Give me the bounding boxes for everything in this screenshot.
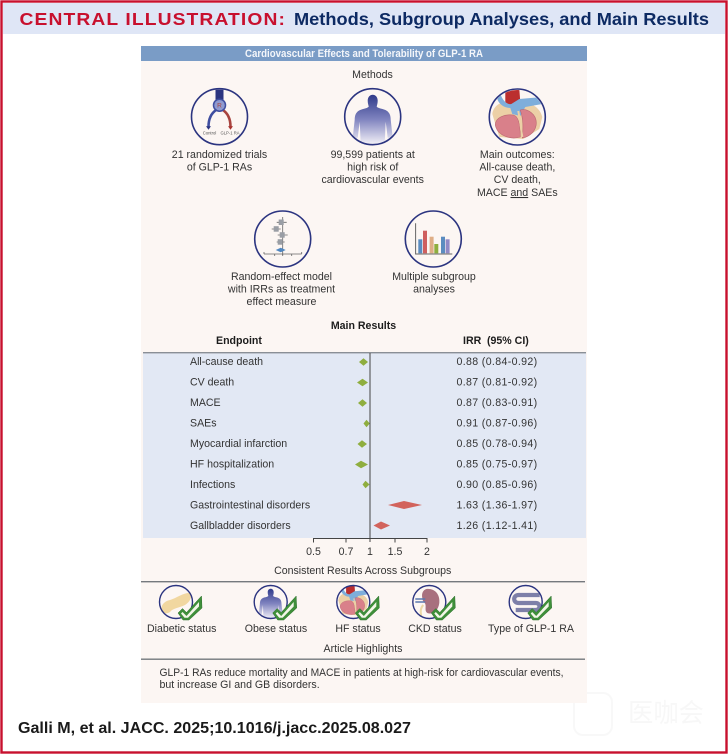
watermark [574,693,704,735]
icon: pancreas with check [160,586,202,620]
axis: 2 [424,546,430,558]
method: subgroup analyses: analyses [413,284,455,296]
IRR values [457,356,537,532]
method: main outcomes [477,89,558,199]
column headers: IRR [463,335,482,347]
IRR values: 1.63 (1.36-1.97) [457,500,537,512]
panel header: Cardiovascular Effects and Tolerability of GLP-1 RA [245,48,483,60]
label: Type of GLP-1 RA [488,623,575,635]
text: trials: 21 randomized trials [172,149,267,161]
IRR values: 1.26 (1.12-1.41) [457,520,537,532]
citation: Galli M, et al. JACC. 2025;10.1016/j.jacc.2025.08.027 [18,720,411,737]
subgroup: HF status [335,585,381,635]
method: main outcomes: MACE and SAEs [477,187,558,199]
heading: consistent results: Consistent Results Across Subgroups [274,565,451,577]
text: outcomes: Main outcomes: [480,149,555,161]
main panel [141,46,587,703]
watermark: 医咖会 [628,698,704,728]
method: randomized trials [172,89,267,174]
row labels: Gallbladder disorders [190,520,291,532]
column headers: Endpoint [216,335,262,347]
IRR values: 0.87 (0.83-0.91) [457,397,537,409]
row labels [190,356,310,532]
axis: 0.7 [339,546,353,558]
method: random-effect model: effect measure [247,296,317,308]
label: CKD status [408,623,462,635]
heading: methods: Methods [352,69,393,81]
label: HF status [335,623,381,635]
column headers: (95% CI) [487,335,529,347]
icon: patient silhouette [345,89,401,145]
row labels: Gastrointestinal disorders [190,500,310,512]
axis: 1.5 [388,546,402,558]
method: main outcomes: CV death, [494,174,541,186]
text: model: Random-effect model [231,271,332,283]
axis: 0.5 [306,546,321,558]
label: Diabetic status [147,623,216,635]
icon: randomization split: Control [203,131,216,136]
icon: patient with check [254,586,297,620]
icon: heart [489,89,545,145]
method: random-effect model: with IRRs as treatment [227,284,335,296]
heading: main results: Main Results [331,320,396,332]
row labels: CV death [190,376,234,388]
row labels: MACE [190,397,221,409]
title banner: Methods, Subgroup Analyses, and Main Results [294,9,709,29]
IRR values: 0.85 (0.75-0.97) [457,458,537,470]
method: patients: high risk of [347,162,398,174]
diamonds [355,358,422,530]
text: patients: 99,599 patients at [331,149,415,161]
IRR values: 0.91 (0.87-0.96) [457,418,537,430]
subgroup: CKD status [408,586,462,635]
subgroup: obese status [245,586,307,635]
method: subgroup analyses [392,211,476,296]
icon: randomization split: GLP-1 RA [220,131,240,136]
heading: article highlights: Article Highlights [324,643,402,655]
method: randomized trials: of GLP-1 RAs [187,162,252,174]
row labels: Infections [190,479,235,491]
method: random-effect model [227,211,335,308]
row labels: HF hospitalization [190,458,274,470]
icon: kidney with check [413,586,455,620]
icon: randomization split [192,89,248,145]
title banner: CENTRAL ILLUSTRATION: [20,9,286,29]
title banner [3,3,725,34]
IRR values: 0.88 (0.84-0.92) [457,356,537,368]
icon: randomization split: R [217,103,222,110]
axis [306,353,430,558]
IRR values: 0.90 (0.85-0.96) [457,479,537,491]
highlights text [160,667,564,691]
highlights text: GLP-1 RAs reduce mortality and MACE in patients at high-risk for cardiovascular events, [160,667,564,679]
row labels: Myocardial infarction [190,438,287,450]
label: Obese status [245,623,307,635]
column headers [216,335,529,347]
subgroup: type of GLP-1 RA [488,586,575,635]
method: patients [321,89,424,186]
subgroup: diabetic status [147,586,216,635]
icon: heart with check [337,585,379,620]
method: main outcomes: All-cause death, [479,162,555,174]
IRR values: 0.85 (0.78-0.94) [457,438,537,450]
method: patients: cardiovascular events [321,174,424,186]
text: subgroups: Multiple subgroup [392,271,476,283]
icon: peptide chain with check [509,586,552,620]
axis: 1 [367,546,373,558]
IRR values: 0.87 (0.81-0.92) [457,376,537,388]
icon: forest plot [255,211,311,267]
row labels: SAEs [190,418,216,430]
highlights text: but increase GI and GB disorders. [160,679,320,691]
forest plot table [143,335,586,558]
panel header [141,46,587,61]
row labels: All-cause death [190,356,263,368]
icon: bar chart [405,211,461,267]
